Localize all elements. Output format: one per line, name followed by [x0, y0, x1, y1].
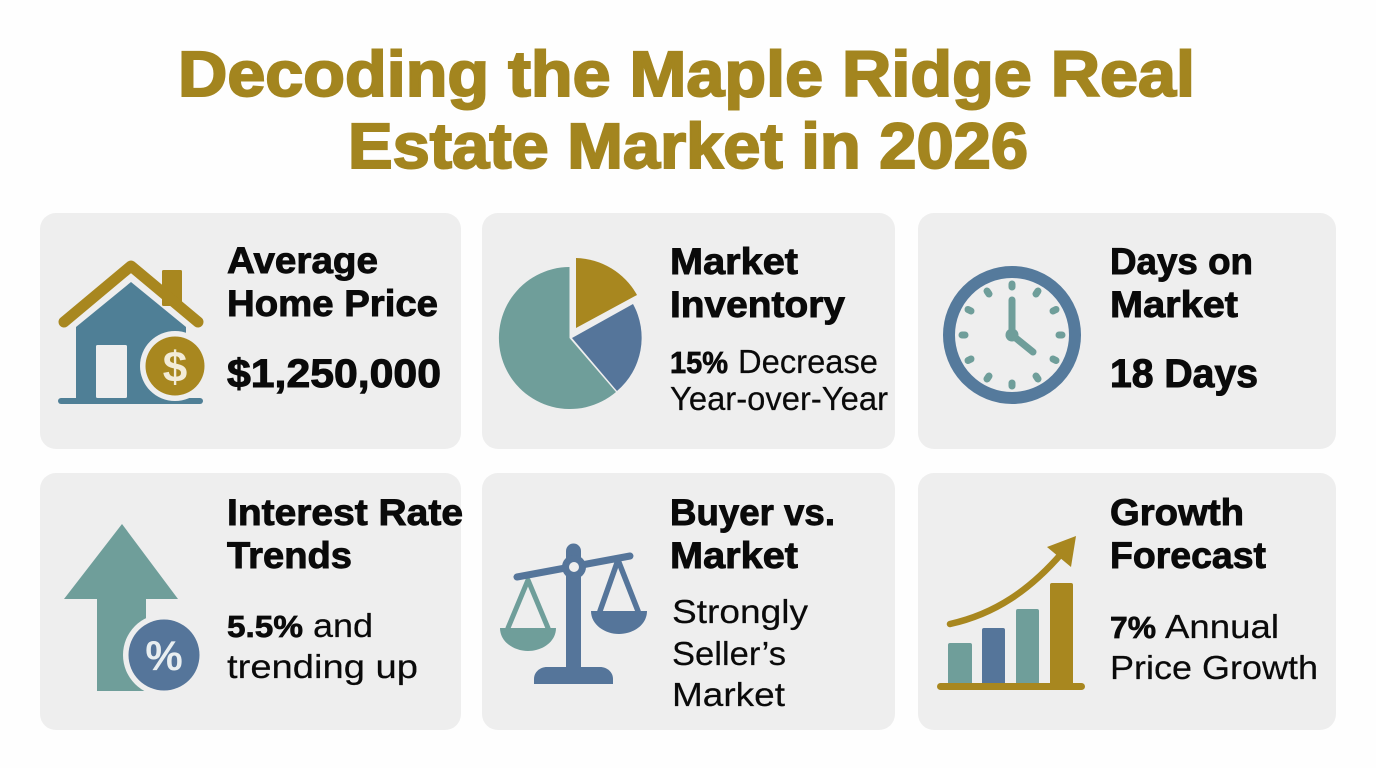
value: 15% [670, 345, 728, 380]
heading: Buyer vs. [670, 492, 835, 533]
value [1110, 608, 1318, 686]
value [670, 343, 888, 417]
heading: Market [670, 535, 798, 576]
panel: interest rate trends [40, 473, 463, 730]
title [178, 38, 1195, 182]
heading: Home Price [227, 283, 438, 324]
icon: pie chart [499, 258, 642, 409]
value [672, 593, 809, 713]
heading [670, 241, 845, 325]
value [227, 607, 418, 685]
value: Year-over-Year [670, 380, 888, 417]
value: 7% [1110, 610, 1156, 645]
icon: up arrow with percent badge: % [145, 632, 183, 679]
icon: up arrow with percent badge [64, 524, 205, 696]
heading: Market [1110, 284, 1238, 325]
heading: Average [227, 240, 378, 281]
title: Estate Market in 2026 [348, 110, 1028, 182]
heading: Interest Rate [227, 492, 463, 533]
heading [227, 240, 438, 324]
value: Seller’s [672, 635, 786, 672]
value: Price Growth [1110, 649, 1318, 686]
value: Annual [1165, 608, 1279, 645]
heading: Market [670, 241, 798, 282]
panel: average home price [40, 213, 461, 449]
heading [227, 492, 463, 576]
value: $1,250,000 [227, 352, 441, 396]
title: Decoding the Maple Ridge Real [178, 38, 1195, 110]
panel: days on market [918, 213, 1336, 449]
value: Market [672, 676, 785, 713]
panel: buyer vs. market [482, 473, 895, 730]
heading: Trends [227, 535, 352, 576]
heading [670, 492, 835, 576]
value: 18 Days [1110, 352, 1258, 396]
heading [1110, 492, 1266, 576]
panel: growth forecast [918, 473, 1336, 730]
value: Decrease [738, 343, 878, 380]
heading: Growth [1110, 492, 1244, 533]
icon: house with dollar coin [58, 266, 210, 404]
heading: Forecast [1110, 535, 1266, 576]
icon: clock [949, 272, 1075, 398]
value: Strongly [672, 593, 809, 630]
icon: house with dollar coin: $ [163, 343, 187, 392]
heading [1110, 241, 1253, 325]
heading: Inventory [670, 284, 845, 325]
panel: market inventory [482, 213, 895, 449]
value: and [313, 607, 373, 644]
value: trending up [227, 648, 418, 685]
icon: bar chart with rising arrow [937, 536, 1085, 690]
value: 5.5% [227, 609, 303, 644]
heading: Days on [1110, 241, 1253, 282]
icon: balance scale [500, 544, 647, 684]
